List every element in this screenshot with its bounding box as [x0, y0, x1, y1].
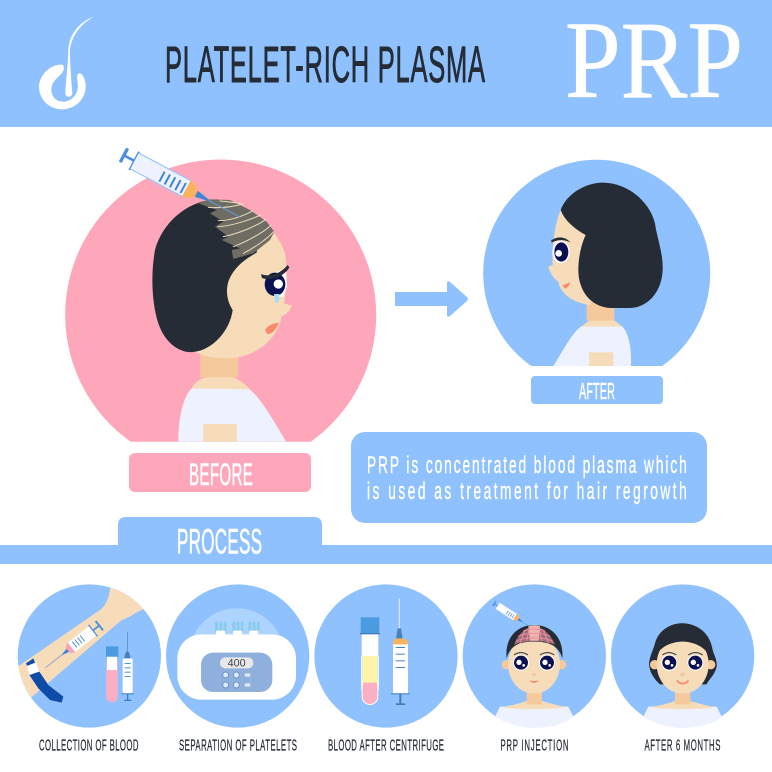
icon: hair follicle logo	[39, 17, 94, 109]
panel: blood after centrifuge	[314, 584, 458, 728]
header band	[0, 0, 772, 127]
callout: PRP definition	[351, 432, 707, 523]
panel: collection of blood	[17, 583, 161, 728]
label: after 6 months: AFTER 6 MONTHS	[644, 737, 720, 754]
label: separation of platelets: SEPARATION OF PLATELETS	[179, 737, 297, 754]
panel: after 6 months	[611, 584, 754, 728]
label: PRP injection: PRP INJECTION	[500, 737, 568, 754]
panel: separation of platelets: 400	[228, 658, 246, 670]
small syringe	[492, 600, 531, 629]
heading: PRP: PRP	[565, 0, 743, 121]
label: before	[129, 453, 311, 493]
heading: process bar	[0, 517, 772, 564]
label: collection of blood: COLLECTION OF BLOOD	[39, 737, 139, 754]
label: after	[531, 376, 663, 404]
arm	[17, 583, 145, 698]
syringe in arm	[41, 619, 105, 674]
callout: PRP definition: PRP is concentrated blood plasma which	[367, 452, 687, 479]
panel: after portrait	[483, 160, 710, 366]
label: after: AFTER	[579, 377, 615, 404]
panel: before portrait	[65, 159, 376, 442]
tourniquet	[26, 658, 63, 703]
title: PLATELET-RICH PLASMA	[165, 36, 485, 93]
arrow	[395, 281, 468, 317]
panel: PRP injection	[463, 584, 606, 728]
label: before: BEFORE	[189, 458, 253, 493]
label: blood after centrifuge: BLOOD AFTER CENTRIFUGE	[328, 737, 444, 754]
heading: process bar: PROCESS	[177, 522, 262, 561]
panel: separation of platelets	[166, 584, 309, 728]
upright syringe	[122, 632, 134, 701]
icon: syringe injecting scalp	[118, 145, 244, 226]
callout: PRP definition: is used as treatment for hair regrowth	[367, 478, 687, 505]
test tube	[106, 646, 118, 702]
